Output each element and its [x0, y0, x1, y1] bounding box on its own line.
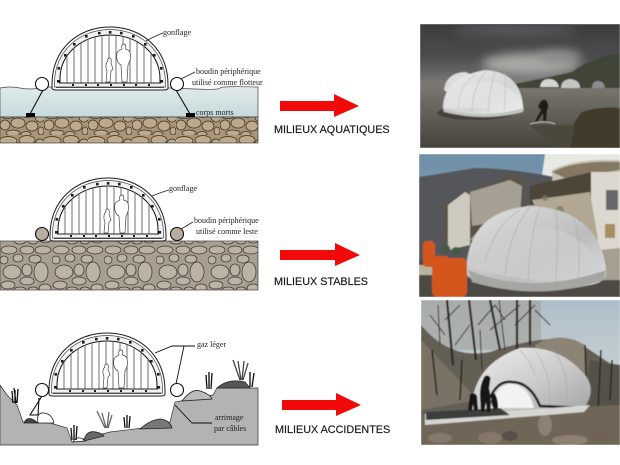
- caption: milieux aquatiques: MILIEUX AQUATIQUES: [274, 124, 390, 136]
- inflatable dome section: [49, 333, 165, 396]
- panel: rough terrain cross-section diagram: [0, 333, 258, 445]
- arrow: rough: [282, 393, 361, 416]
- label: boudin leste: [181, 216, 259, 236]
- label: gonflage: [152, 184, 197, 196]
- panel: aquatic cross-section diagram: [0, 27, 263, 143]
- rocky terrain: [0, 385, 258, 445]
- label: gonflage: [146, 28, 191, 41]
- label: boudin flotteur: boudin périphérique: [196, 67, 261, 76]
- photo: dome among earthquake ruins: [419, 154, 620, 297]
- photo: dome in burnt forest: [421, 300, 620, 445]
- inflatable dome section: [50, 178, 166, 241]
- ballast ring tubes: [36, 228, 184, 240]
- floating ring tubes: [36, 78, 184, 90]
- photo: floating domes on water: [420, 24, 620, 148]
- label: boudin leste: boudin périphérique: [194, 216, 259, 225]
- label: corps morts: corps morts: [196, 108, 234, 117]
- arrow: aquatic: [280, 94, 359, 117]
- label: boudin leste: utilisé comme leste: [196, 227, 258, 236]
- label: gaz léger: gaz léger: [197, 340, 226, 349]
- label: gonflage: gonflage: [169, 184, 197, 193]
- label: arrimage par câbles: par câbles: [214, 424, 246, 433]
- panel: stable ground cross-section diagram: [0, 178, 259, 290]
- stone lake bed: [0, 117, 258, 143]
- label: boudin flotteur: [181, 67, 263, 87]
- label: boudin flotteur: utilisé comme flotteur: [192, 78, 263, 87]
- label: gaz léger: [155, 340, 226, 384]
- anchor cable left: [30, 396, 42, 415]
- caption: milieux accidentes: MILIEUX ACCIDENTES: [275, 424, 390, 436]
- boulders: [24, 381, 250, 442]
- caption: milieux stables: MILIEUX STABLES: [274, 276, 368, 288]
- arrow: stable: [280, 243, 360, 266]
- ring tubes: [36, 384, 184, 396]
- shrubs: [12, 360, 254, 440]
- label: arrimage par câbles: [175, 405, 246, 433]
- inflatable dome section: [52, 27, 168, 90]
- mooring cables and dead weights: [26, 90, 195, 117]
- label: gonflage: gonflage: [163, 28, 191, 37]
- stone ground: [0, 241, 258, 290]
- label: arrimage par câbles: arrimage: [215, 413, 244, 422]
- water body: [0, 87, 258, 117]
